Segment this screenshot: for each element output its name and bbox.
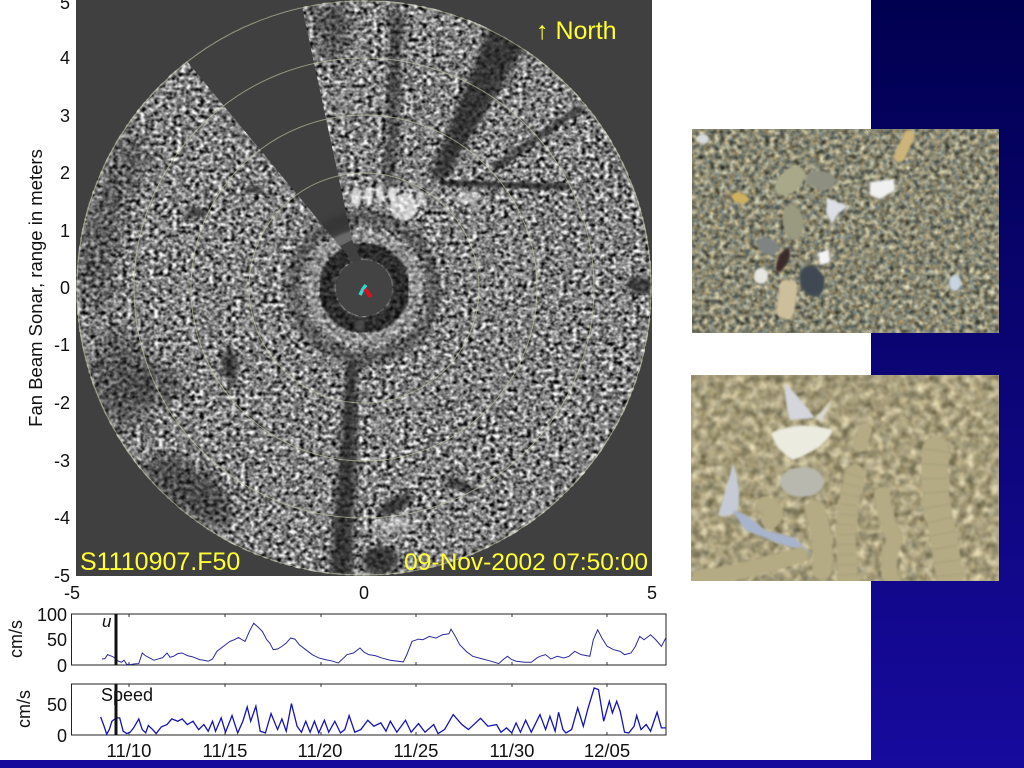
- sonar x axis labels: -5: [64, 583, 80, 603]
- y ticks: [37, 605, 67, 676]
- shell fragments: [718, 383, 833, 554]
- sonar image panel: [76, 0, 654, 576]
- y ticks: 0: [57, 726, 67, 746]
- timestamp label: 09-Nov-2002 07:50:00: [404, 549, 648, 576]
- north label: ↑ North: [536, 17, 617, 45]
- sonar y axis labels: -3: [54, 451, 70, 471]
- date labels: 11/10: [107, 740, 151, 761]
- date labels: [107, 740, 630, 761]
- date labels: 11/25: [394, 740, 438, 761]
- u trace: [102, 623, 666, 665]
- sonar y axis labels: -5: [54, 566, 70, 586]
- sonar y axis labels: [54, 0, 70, 586]
- sonar x axis labels: [64, 583, 657, 603]
- photo: sand with shells and worm casts: [691, 375, 999, 581]
- sonar y axis labels: 1: [60, 221, 70, 241]
- chart: speed: [14, 684, 666, 761]
- y ticks: 100: [37, 605, 67, 625]
- date labels: 11/15: [203, 740, 247, 761]
- sonar y axis labels: 4: [60, 48, 70, 68]
- instrument marker: cyan and red: [360, 285, 371, 297]
- u label: u: [102, 612, 112, 631]
- sonar x axis labels: 5: [647, 583, 657, 603]
- y axis title: cm/s: [14, 690, 34, 728]
- date labels: 11/20: [298, 740, 342, 761]
- y ticks: 0: [57, 656, 67, 676]
- sonar y axis labels: 0: [60, 278, 70, 298]
- sonar y axis labels: 3: [60, 106, 70, 126]
- sonar y axis title: Fan Beam Sonar, range in meters: [25, 149, 46, 427]
- speed trace: [101, 688, 666, 734]
- central rings: [294, 218, 434, 358]
- y axis title: cm/s: [6, 620, 26, 658]
- y ticks: 50: [47, 695, 67, 715]
- date labels: 11/30: [490, 740, 534, 761]
- chart: u velocity: [6, 605, 666, 676]
- sonar y axis labels: 2: [60, 163, 70, 183]
- speed label: Speed: [101, 685, 153, 705]
- time cursor: [114, 614, 118, 665]
- file name label: S1110907.F50: [80, 548, 240, 576]
- worm casts: [700, 430, 950, 580]
- date labels: 12/05: [584, 740, 630, 761]
- bright echoes near transducer: [351, 185, 481, 533]
- time cursor: [114, 684, 118, 735]
- pebbles: [697, 128, 961, 319]
- sonar x axis labels: 0: [359, 583, 369, 603]
- photo: sand with pebbles and shell fragments: [692, 128, 999, 333]
- sonar y axis labels: -4: [54, 508, 70, 528]
- range rings: [77, 1, 651, 575]
- y ticks: 50: [47, 630, 67, 650]
- sonar y axis labels: -2: [54, 393, 70, 413]
- y ticks: [47, 695, 67, 746]
- sonar noise texture: [76, 0, 652, 576]
- sonar y axis labels: -1: [54, 335, 70, 355]
- empty wedge sector: [187, 7, 353, 262]
